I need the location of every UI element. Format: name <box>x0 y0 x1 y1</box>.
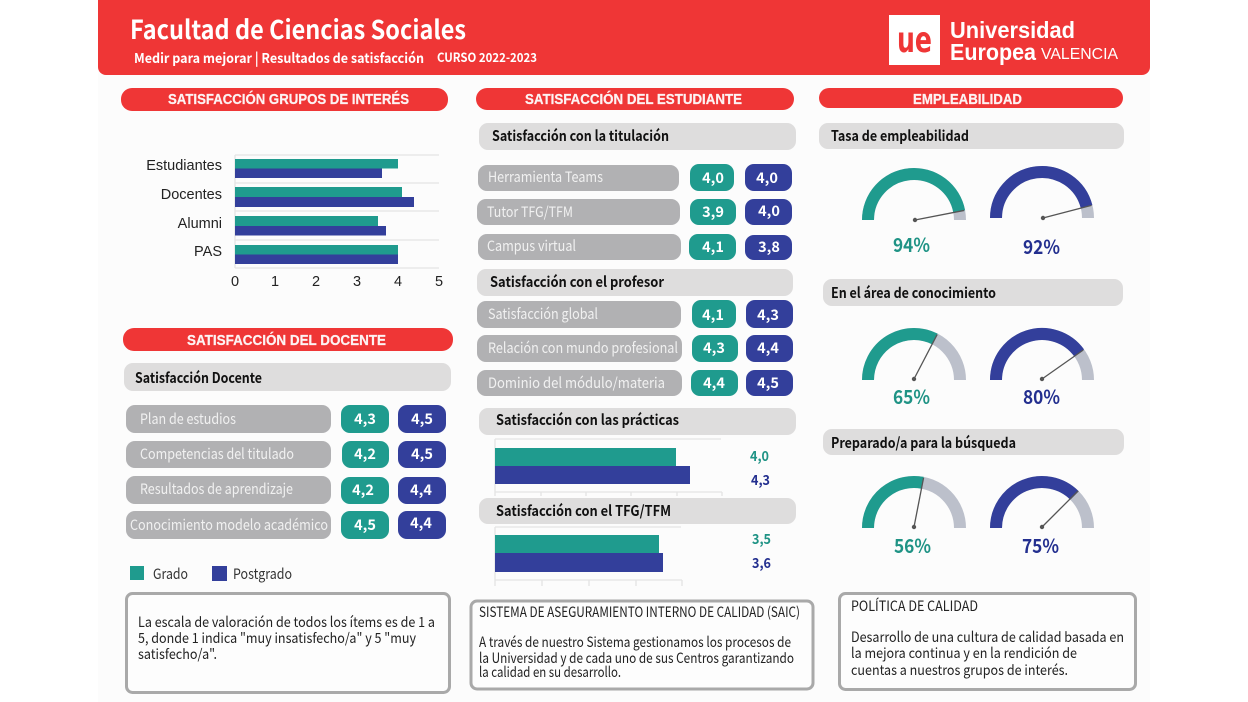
heading: satisfacción del docente <box>123 328 453 351</box>
row: competencias del titulado: 4,5 <box>411 443 433 464</box>
subheading: en el área de conocimiento: En el área de conocimiento <box>831 282 996 303</box>
row: conocimiento modelo académico: Conocimiento modelo académico <box>130 514 328 535</box>
heading: satisfacción del estudiante <box>476 88 794 110</box>
bar chart: grupos de interés: Alumni <box>178 216 222 232</box>
callout: escala de valoración <box>126 594 450 692</box>
row: campus virtual: 4,1 <box>702 236 724 257</box>
bar chart: prácticas: 4,3 <box>751 470 770 490</box>
bar chart: grupos de interés: Docentes <box>161 187 222 203</box>
legend: Grado <box>153 563 188 584</box>
bar chart: grupos de interés: 3 <box>353 274 361 290</box>
subheading: en el área de conocimiento <box>823 279 1123 306</box>
row: competencias del titulado: Competencias del titulado <box>140 443 294 464</box>
heading: empleabilidad: EMPLEABILIDAD <box>913 92 1022 108</box>
heading: grupos de interés <box>121 88 448 111</box>
subheading: satisfacción con la titulación <box>479 123 796 150</box>
callout: sistema de aseguramiento interno de calidad: la calidad en su desarrollo. <box>479 662 621 682</box>
row: herramienta teams: 4,0 <box>756 167 778 188</box>
row: tutor tfg/tfm: 3,9 <box>702 201 724 222</box>
row: campus virtual <box>478 234 792 260</box>
logo: Universidad Europea Valencia: Europea <box>950 39 1036 65</box>
row: satisfacción global: Satisfacción global <box>488 303 598 324</box>
callout: política de calidad: Desarrollo de una cultura de calidad basada en <box>851 627 1124 647</box>
callout: sistema de aseguramiento interno de calidad: la Universidad y de cada uno de sus Centros garantizando <box>479 648 794 668</box>
subheading: satisfacción con las prácticas: Satisfacción con las prácticas <box>496 409 679 430</box>
row: competencias del titulado <box>126 441 446 468</box>
subheading: satisfacción con las prácticas <box>479 408 796 435</box>
subheading: satisfacción con el profesor: Satisfacción con el profesor <box>490 271 665 292</box>
callout: sistema de aseguramiento interno de calidad: A través de nuestro Sistema gestionamos los procesos de <box>479 632 791 652</box>
heading: satisfacción del estudiante: SATISFACCIÓN DEL ESTUDIANTE <box>525 90 742 108</box>
row: conocimiento modelo académico <box>126 511 446 539</box>
subheading: tasa de empleabilidad: Tasa de empleabilidad <box>831 125 969 146</box>
bar chart: tfg/tfm: 3,6 <box>752 553 771 573</box>
subheading: satisfacción con el tfg/tfm <box>479 498 796 524</box>
gauge: 92% postgrado <box>996 172 1091 260</box>
row: herramienta teams: Herramienta Teams <box>488 166 603 187</box>
bar chart: grupos de interés: Estudiantes <box>146 158 222 174</box>
header banner <box>98 0 1150 75</box>
panel: empleabilidad <box>819 88 1124 559</box>
row: plan de estudios: 4,5 <box>411 408 433 429</box>
row: relación con mundo profesional: Relación con mundo profesional <box>488 337 678 358</box>
legend: Postgrado <box>233 563 292 584</box>
panel: satisfacción del docente <box>123 328 453 539</box>
subheading: preparado/a para la búsqueda: Preparado/a para la búsqueda <box>831 432 1016 453</box>
subheading: satisfacción docente: Satisfacción Docente <box>135 367 262 388</box>
gauge: 94% grado: 94% <box>893 229 930 258</box>
row: conocimiento modelo académico: 4,5 <box>354 514 376 535</box>
gauge: 75% postgrado: 75% <box>1022 530 1059 559</box>
row: tutor tfg/tfm <box>477 199 792 225</box>
callout: escala de valoración: 5, donde 1 indica "muy insatisfecho/a" y 5 "muy <box>138 628 417 648</box>
subheading: satisfacción con el profesor <box>477 269 793 296</box>
row: relación con mundo profesional <box>477 335 793 362</box>
row: satisfacción global: 4,1 <box>702 304 724 325</box>
subheading: tasa de empleabilidad <box>819 123 1124 149</box>
bar chart: tfg/tfm <box>495 527 771 586</box>
logo: Universidad Europea Valencia: ue <box>897 20 932 61</box>
row: dominio del módulo/materia: 4,5 <box>757 372 779 393</box>
gauge: 65% grado <box>868 334 960 410</box>
row: campus virtual: 3,8 <box>758 236 780 257</box>
gauge: 92% postgrado: 92% <box>1023 231 1060 260</box>
row: tutor tfg/tfm: 4,0 <box>758 200 780 221</box>
heading: satisfacción del docente: SATISFACCIÓN DEL DOCENTE <box>187 331 386 349</box>
gauge: 56% grado: 56% <box>894 530 931 559</box>
bar chart: tfg/tfm: 3,5 <box>752 529 771 549</box>
logo: Universidad Europea Valencia: VALENCIA <box>1041 46 1118 63</box>
row: plan de estudios: 4,3 <box>354 408 376 429</box>
logo: Universidad Europea Valencia <box>889 15 1118 65</box>
row: resultados de aprendizaje: Resultados de aprendizaje <box>140 478 293 499</box>
bar chart: prácticas <box>495 439 770 496</box>
bar chart: grupos de interés <box>146 155 443 290</box>
gauge: 80% postgrado <box>996 334 1088 410</box>
course year: CURSO 2022-2023 <box>437 47 537 66</box>
panel: satisfacción del estudiante <box>476 88 796 586</box>
row: resultados de aprendizaje: 4,2 <box>352 479 374 500</box>
gauge: 75% postgrado <box>996 482 1088 559</box>
row: herramienta teams <box>478 164 792 191</box>
logo: Universidad Europea Valencia: Universidad <box>950 17 1075 43</box>
legend <box>130 563 292 584</box>
subheading: satisfacción docente <box>124 363 451 391</box>
bar chart: grupos de interés: 5 <box>435 274 443 290</box>
gauge: 94% grado <box>868 174 964 258</box>
callout: escala de valoración: satisfecho/a". <box>138 644 217 664</box>
panel: satisfacción grupos de interés <box>121 88 448 290</box>
bar chart: grupos de interés: PAS <box>194 244 222 260</box>
subtitle: Medir para mejorar | Resultados de satisfacción <box>134 47 424 67</box>
gauge: 80% postgrado: 80% <box>1023 381 1060 410</box>
bar chart: grupos de interés: 0 <box>231 274 239 290</box>
bar chart: grupos de interés: 4 <box>394 274 402 290</box>
row: dominio del módulo/materia <box>477 370 793 396</box>
row: relación con mundo profesional: 4,3 <box>703 337 725 358</box>
row: tutor tfg/tfm: Tutor TFG/TFM <box>487 201 573 222</box>
subheading: preparado/a para la búsqueda <box>823 429 1124 455</box>
subheading: satisfacción con la titulación: Satisfacción con la titulación <box>492 125 669 146</box>
bar chart: prácticas: 4,0 <box>750 446 769 466</box>
row: plan de estudios <box>126 405 446 433</box>
gauge: 56% grado <box>868 478 960 559</box>
callout: política de calidad: POLÍTICA DE CALIDAD <box>851 596 978 616</box>
callout: escala de valoración: La escala de valoración de todos los ítems es de 1 a <box>138 612 435 632</box>
row: campus virtual: Campus virtual <box>487 235 576 256</box>
subheading: satisfacción con el tfg/tfm: Satisfacción con el TFG/TFM <box>496 500 671 521</box>
row: herramienta teams: 4,0 <box>702 167 724 188</box>
row: satisfacción global <box>477 300 793 328</box>
row: resultados de aprendizaje: 4,4 <box>410 479 432 500</box>
callout: política de calidad <box>840 594 1136 690</box>
title: Facultad de Ciencias Sociales <box>130 10 466 47</box>
row: dominio del módulo/materia: Dominio del módulo/materia <box>488 372 665 393</box>
row: satisfacción global: 4,3 <box>757 304 779 325</box>
callout: política de calidad: cuentas a nuestros grupos de interés. <box>851 660 1068 680</box>
row: competencias del titulado: 4,2 <box>354 443 376 464</box>
bar chart: grupos de interés: 2 <box>312 274 320 290</box>
gauge: 65% grado: 65% <box>893 381 930 410</box>
heading: empleabilidad <box>819 88 1123 108</box>
callout: sistema de aseguramiento interno de calidad <box>471 601 813 689</box>
bar chart: grupos de interés: 1 <box>271 274 279 290</box>
callout: política de calidad: la mejora continua y en la rendición de <box>851 643 1077 663</box>
heading: grupos de interés: SATISFACCIÓN GRUPOS DE INTERÉS <box>168 90 409 108</box>
row: dominio del módulo/materia: 4,4 <box>703 372 725 393</box>
callout: sistema de aseguramiento interno de calidad: SISTEMA DE ASEGURAMIENTO INTERNO DE CALIDAD (SAIC) <box>479 602 800 622</box>
row: resultados de aprendizaje <box>126 476 446 504</box>
row: plan de estudios: Plan de estudios <box>140 408 236 429</box>
row: conocimiento modelo académico: 4,4 <box>410 512 432 533</box>
row: relación con mundo profesional: 4,4 <box>757 337 779 358</box>
